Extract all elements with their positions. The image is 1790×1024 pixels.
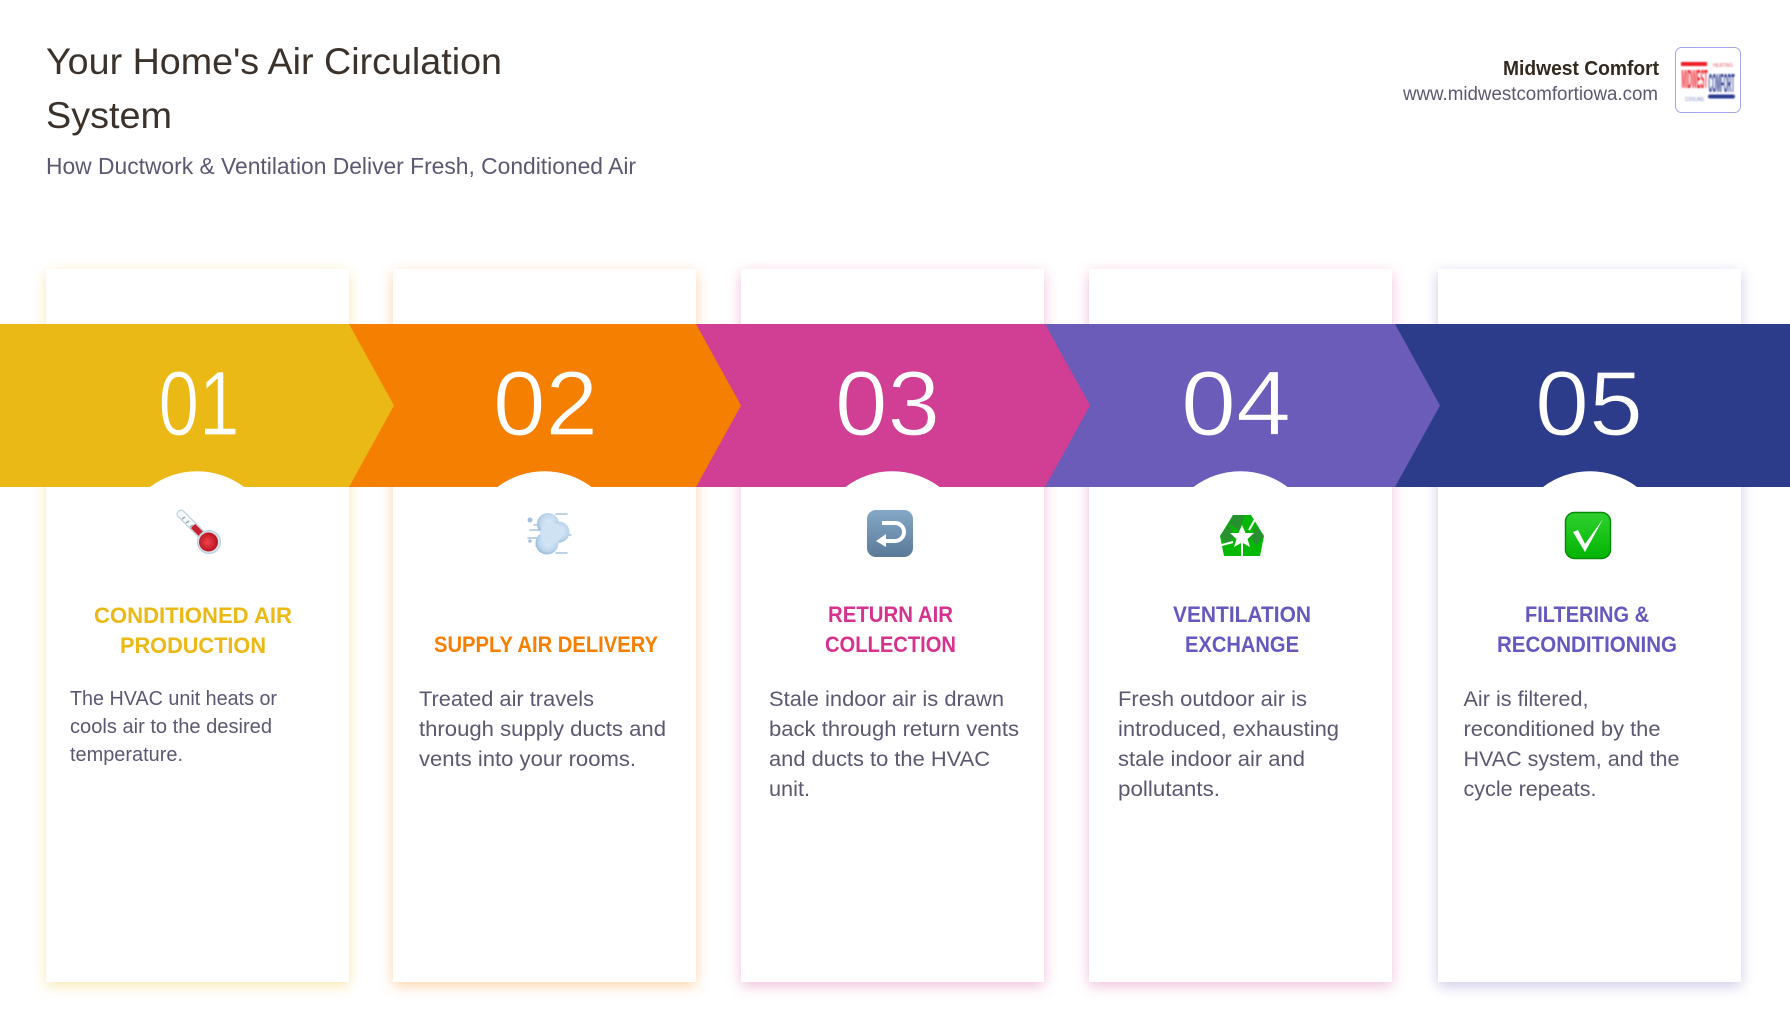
icon: wind puff [528,513,571,554]
step 2 text [419,688,666,771]
icon: return arrow [867,510,913,557]
step 1 text: temperature. [70,744,183,766]
panel: card 2 [393,269,696,986]
panel: card 5 [1438,269,1741,986]
number 01: 01 [158,353,240,455]
step 5 text: Air is filtered, [1464,688,1588,711]
step 4 text [1118,688,1339,801]
logo [1676,48,1740,112]
step 2 text: vents into your rooms. [419,748,636,771]
step 5 heading: FILTERING & [1525,602,1649,627]
icon: recycling [1218,515,1264,559]
arrow 04 [1030,324,1440,487]
step 3 heading [825,602,956,657]
logo: HEATING [1713,63,1733,69]
subtitle: How Ductwork & Ventilation Deliver Fresh, Conditioned Air [46,153,636,179]
step 4 heading: EXCHANGE [1185,632,1299,657]
step 1 text: The HVAC unit heats or [70,688,277,710]
step 2 text: Treated air travels [419,688,594,711]
step 3 text: unit. [769,778,810,801]
title [46,41,502,136]
company name and website: www.midwestcomfortiowa.com [1402,84,1658,105]
step 1 text: cools air to the desired [70,716,272,738]
icon: check mark [1566,512,1610,558]
step 3 text [769,688,1019,801]
step 5 text: cycle repeats. [1464,778,1596,801]
arrow 01 [0,324,394,487]
arrow 02 [330,324,741,487]
icon: thermometer [181,514,220,554]
arrow 03 [680,324,1090,487]
step 5 text: reconditioned by the [1464,718,1660,741]
step 1 heading [94,603,292,658]
title: System [46,95,172,136]
step 4 heading [1173,602,1311,657]
arrow 05 [1380,324,1790,487]
panel: card 3 [741,269,1044,986]
step 1 text [70,688,277,766]
company name and website: Midwest Comfort [1503,57,1659,80]
step 3 text: back through return vents [769,718,1019,741]
number 04: 04 [1181,353,1291,455]
step 3 text: Stale indoor air is drawn [769,688,1004,711]
number 05: 05 [1535,353,1643,455]
step 5 text: HVAC system, and the [1464,748,1680,771]
step 3 text: and ducts to the HVAC [769,748,990,771]
step 4 text: introduced, exhausting [1118,718,1339,741]
panel: card 1 [46,269,349,986]
company name and website [1402,57,1659,105]
step 5 heading: RECONDITIONING [1497,632,1677,657]
step 1 heading: CONDITIONED AIR [94,603,292,628]
step 1 heading: PRODUCTION [120,633,266,658]
step 3 heading: COLLECTION [825,632,956,657]
step 4 text: stale indoor air and [1118,748,1305,771]
step 3 heading: RETURN AIR [828,602,953,627]
panel: card 4 [1089,269,1392,986]
chevron band [0,324,1790,487]
step 4 text: Fresh outdoor air is [1118,688,1307,711]
step 4 heading: VENTILATION [1173,602,1311,627]
number 03: 03 [835,353,940,455]
step 4 text: pollutants. [1118,778,1220,801]
number 02: 02 [493,353,598,455]
step 5 text [1464,688,1680,801]
step 5 heading [1497,602,1677,657]
step 2 heading: SUPPLY AIR DELIVERY [434,632,658,657]
dome notches [150,471,1637,487]
logo: COOLING [1685,97,1704,103]
step 2 text: through supply ducts and [419,718,666,741]
title: Your Home's Air Circulation [46,41,502,82]
